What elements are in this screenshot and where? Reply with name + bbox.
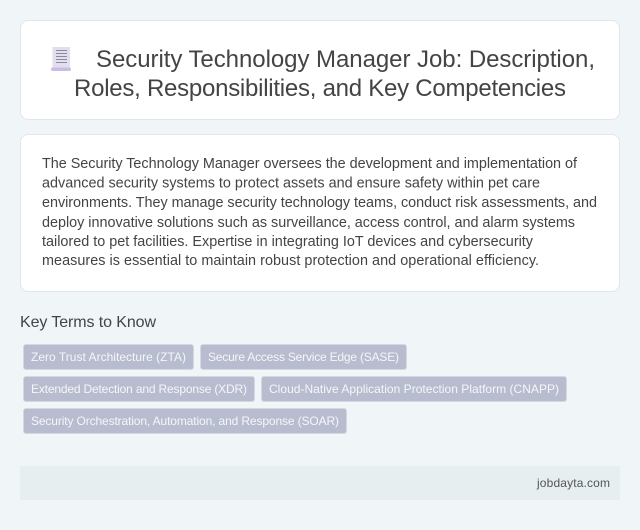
footer bar xyxy=(20,466,620,500)
description text: advanced security systems to protect assets and ensure safety within pet care xyxy=(42,176,540,192)
chip: CNAPP xyxy=(261,376,567,402)
description text: deploy innovative solutions such as surveillance, access control, and alarm systems xyxy=(42,215,575,231)
panel: description card xyxy=(20,134,620,292)
chip: ZTA xyxy=(23,344,194,370)
panel: title card xyxy=(20,20,620,120)
chip: SASE xyxy=(200,344,407,370)
chip labels: Extended Detection and Response (XDR) xyxy=(31,382,247,396)
icon: document scroll xyxy=(51,47,71,71)
chip labels: Zero Trust Architecture (ZTA) xyxy=(31,350,186,364)
description text: The Security Technology Manager oversees the development and implementation of xyxy=(42,156,578,172)
description text: measures is essential to maintain robust protection and operational efficiency. xyxy=(42,253,539,269)
chip labels: Cloud-Native Application Protection Platform (CNAPP) xyxy=(269,382,559,396)
title: Roles, Responsibilities, and Key Competencies xyxy=(74,75,566,102)
chip labels: Secure Access Service Edge (SASE) xyxy=(208,350,399,364)
description text: environments. They manage security technology teams, conduct risk assessments, and xyxy=(42,195,597,211)
chip: XDR xyxy=(23,376,255,402)
footer source: jobdayta.com xyxy=(536,476,610,490)
title: Security Technology Manager Job: Description, xyxy=(96,46,595,73)
description text xyxy=(42,156,597,269)
chip labels: Security Orchestration, Automation, and Response (SOAR) xyxy=(31,414,339,428)
chip: SOAR xyxy=(23,408,347,434)
chip labels xyxy=(31,350,559,428)
description text: tailored to pet facilities. Expertise in integrating IoT devices and cybersecurity xyxy=(42,234,534,250)
heading: key terms: Key Terms to Know xyxy=(20,314,156,331)
title xyxy=(74,46,595,102)
